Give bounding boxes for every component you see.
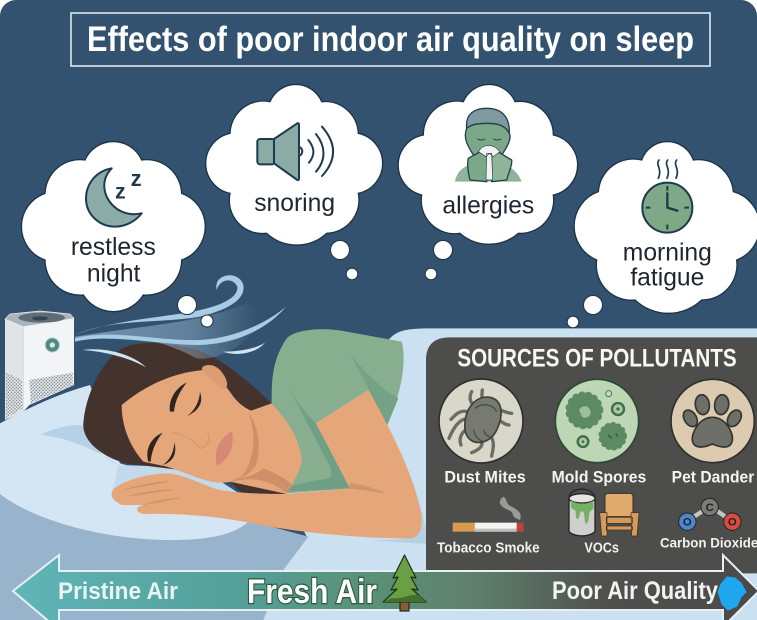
thought bubbles: allergies bbox=[425, 240, 452, 280]
arm and hand bbox=[112, 390, 422, 538]
label: fatigue bbox=[630, 264, 704, 291]
label: mold spores: Mold Spores bbox=[552, 468, 646, 487]
icon: carbon dioxide molecule: O bbox=[728, 517, 737, 529]
icon: moon: z bbox=[131, 166, 142, 191]
icon: carbon dioxide molecule bbox=[679, 498, 741, 530]
air flow bbox=[75, 275, 286, 367]
blue blot bbox=[718, 577, 746, 610]
label: dust mites: Dust Mites bbox=[444, 468, 526, 487]
icon: speaker bbox=[257, 123, 333, 180]
blanket bbox=[0, 490, 308, 620]
thought cloud: morning fatigue bbox=[574, 142, 757, 313]
eye lower bbox=[147, 433, 175, 465]
icon: clock with steam bbox=[642, 160, 692, 233]
ear bbox=[202, 365, 227, 389]
thought cloud: allergies bbox=[398, 84, 578, 244]
shirt bbox=[272, 329, 404, 493]
icon: dust mite bbox=[439, 379, 523, 463]
label: allergies bbox=[442, 192, 534, 219]
thought cloud: snoring bbox=[206, 84, 383, 245]
label: night bbox=[87, 260, 141, 287]
icon: cigarette bbox=[453, 497, 524, 532]
label: pet dander: Pet Dander bbox=[672, 468, 755, 487]
hair lock bbox=[230, 478, 285, 494]
icon: pine tree bbox=[383, 555, 426, 611]
icon: moon: z bbox=[115, 179, 126, 203]
bed sheet bbox=[260, 328, 757, 620]
thought cloud: restless night bbox=[21, 142, 205, 312]
icon: mold spores bbox=[555, 379, 639, 463]
icon: paw print bbox=[671, 379, 754, 463]
lips bbox=[216, 431, 233, 466]
air purifier bbox=[5, 311, 74, 420]
face bbox=[122, 370, 264, 483]
icon: moon bbox=[86, 166, 142, 227]
thought bubbles: snoring bbox=[330, 240, 358, 280]
label: pristine air: Pristine Air bbox=[58, 578, 178, 605]
nose bbox=[173, 432, 209, 448]
pillow shadow bbox=[40, 425, 118, 465]
label: vocs: VOCs bbox=[584, 541, 619, 557]
icon: carbon dioxide molecule: O bbox=[683, 517, 692, 529]
eye upper bbox=[170, 382, 201, 416]
label: snoring bbox=[254, 190, 335, 217]
arm crease bbox=[123, 482, 385, 505]
label: fresh air: Fresh Air bbox=[247, 573, 377, 611]
pillow bbox=[0, 385, 248, 540]
illustration: sleeping woman in bed bbox=[0, 275, 757, 620]
label: morning bbox=[623, 240, 712, 267]
label: tobacco smoke: Tobacco Smoke bbox=[437, 541, 540, 557]
thought bubbles: restless night bbox=[178, 296, 213, 327]
neck bbox=[230, 403, 302, 494]
title bbox=[71, 13, 710, 66]
thought bubbles: morning fatigue bbox=[567, 296, 602, 328]
hair bbox=[83, 343, 272, 470]
arm shadow on sheet bbox=[373, 425, 427, 544]
icon: person sneezing bbox=[455, 108, 522, 182]
label: poor air quality: Poor Air Quality bbox=[552, 577, 718, 605]
air quality arrow bbox=[13, 555, 757, 620]
icon: paint can and chair bbox=[569, 489, 639, 536]
panel: sources of pollutants bbox=[426, 337, 757, 573]
label: restless bbox=[71, 234, 156, 261]
neck shadow bbox=[230, 413, 293, 493]
icon: carbon dioxide molecule: C bbox=[706, 502, 714, 514]
